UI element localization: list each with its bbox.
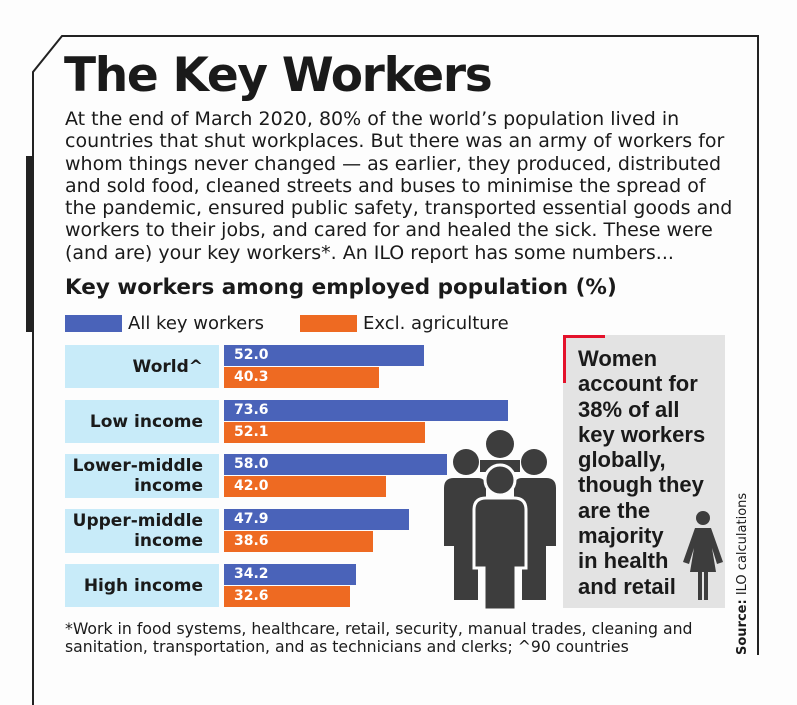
bar chart	[65, 345, 508, 607]
intro text: At the end of March 2020, 80% of the world’s population lived in	[65, 108, 679, 130]
bar chart: 40.3	[234, 369, 269, 385]
footnote: *Work in food systems, healthcare, retail, security, manual trades, cleaning and	[65, 619, 692, 638]
legend	[65, 313, 509, 334]
bar chart: Lower-middle	[73, 456, 203, 476]
callout: women: key workers	[578, 422, 705, 447]
bar chart: Upper-middle	[73, 511, 203, 531]
bar chart: 73.6	[234, 402, 269, 418]
intro text: workers to their jobs, and cared for and healed the sick. These were	[65, 219, 713, 241]
callout: women: Women	[578, 346, 657, 371]
bar chart: income	[134, 476, 203, 496]
footnote: sanitation, transportation, and as technicians and clerks; ^90 countries	[65, 637, 629, 656]
bar chart: High income	[84, 576, 203, 596]
bar chart: 34.2	[234, 566, 269, 582]
title: The Key Workers	[64, 48, 491, 103]
intro text	[65, 108, 732, 264]
callout: women: majority	[578, 523, 664, 548]
callout: women: 38% of all	[578, 397, 679, 422]
callout: women: in health	[578, 548, 668, 573]
bar chart: 38.6	[234, 533, 269, 549]
intro text: whom things never changed — as earlier, they produced, distributed	[65, 153, 721, 175]
bar chart: 32.6	[234, 588, 269, 604]
bar chart: 42.0	[234, 478, 269, 494]
bar chart: World^	[133, 356, 203, 376]
callout: women: and retail	[578, 574, 676, 599]
legend: All key workers	[128, 313, 264, 334]
icon: group of workers	[444, 430, 556, 608]
callout: women: are the	[578, 498, 650, 523]
bar chart: Low income	[90, 412, 203, 432]
callout: women: account for	[578, 371, 698, 396]
intro text: the pandemic, ensured public safety, transported essential goods and	[65, 197, 732, 219]
intro text: (and are) your key workers*. An ILO report has some numbers...	[65, 242, 674, 264]
bar chart: 52.1	[234, 424, 269, 440]
callout: women	[563, 335, 725, 608]
source: Source: ILO calculations	[735, 493, 750, 655]
callout: women: globally,	[578, 447, 666, 472]
bar chart: 52.0	[234, 347, 269, 363]
bar chart: 58.0	[234, 456, 269, 472]
bar chart: 47.9	[234, 511, 269, 527]
bar chart: income	[134, 531, 203, 551]
callout: women: though they	[578, 472, 704, 497]
footnote	[65, 619, 692, 656]
legend: Excl. agriculture	[363, 313, 509, 334]
icon: woman	[683, 511, 723, 600]
intro text: countries that shut workplaces. But there was an army of workers for	[65, 130, 724, 152]
intro text: and sold food, cleaned streets and buses to minimise the spread of	[65, 175, 706, 197]
chart heading: Key workers among employed population (%)	[65, 275, 617, 300]
